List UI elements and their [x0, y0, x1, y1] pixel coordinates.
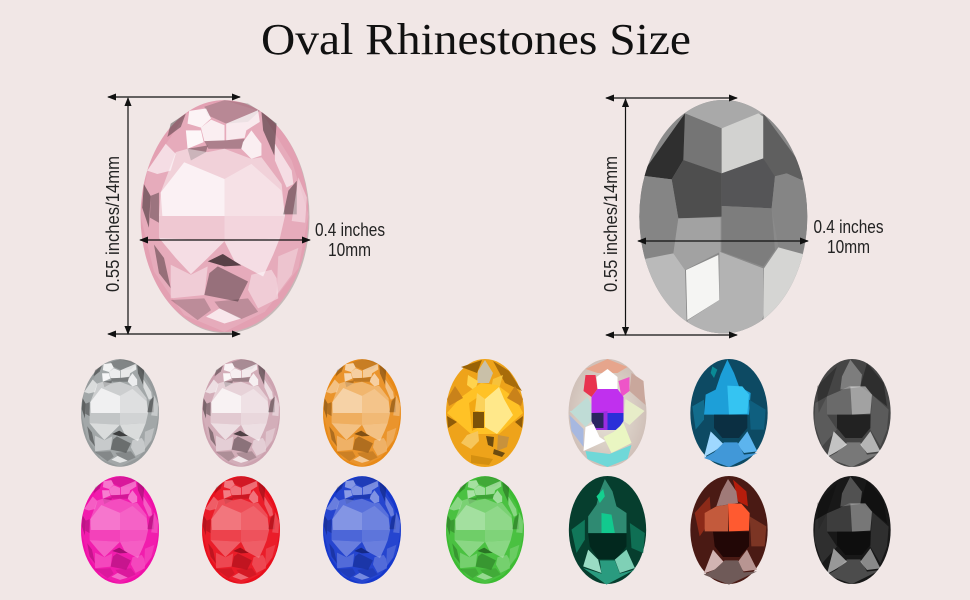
width label	[315, 219, 385, 260]
icon: magenta gem	[81, 476, 159, 584]
icon: emerald gem	[569, 476, 646, 585]
width label: 0.4 inches	[315, 219, 385, 240]
height label: 0.55 inches/14mm	[102, 156, 123, 292]
title: Oval Rhinestones Size	[261, 15, 691, 64]
arrow: width	[638, 240, 808, 242]
icon: orange gem	[323, 359, 401, 467]
arrow: height	[127, 98, 129, 334]
icon: clear gem	[81, 359, 159, 467]
width label: 0.4 inches	[814, 216, 884, 237]
large back-side gem with dimensions	[600, 93, 884, 340]
width label	[814, 216, 884, 257]
icon: large pink oval rhinestone	[140, 100, 310, 333]
arrow: width	[140, 239, 310, 241]
icon: light green gem	[446, 476, 524, 584]
width label: 10mm	[827, 236, 870, 257]
icon: black gem	[813, 476, 891, 584]
icon: light pink gem	[202, 359, 280, 467]
large pink gem with dimensions	[102, 97, 385, 334]
arrow: top width guide	[108, 96, 240, 98]
height label: 0.55 inches/14mm	[600, 156, 621, 292]
arrow: bottom width guide	[606, 334, 737, 336]
icon: red gem	[202, 476, 280, 584]
colour swatches grid	[81, 359, 891, 585]
icon: teal blue gem	[690, 359, 768, 467]
icon: blue gem	[323, 476, 401, 584]
arrow: top width guide	[606, 97, 737, 99]
icon: aurora borealis gem	[568, 359, 646, 467]
arrow: bottom width guide	[108, 333, 240, 335]
width label: 10mm	[328, 239, 371, 260]
icon: grey gem	[813, 359, 891, 467]
icon: amber yellow gem	[446, 359, 524, 467]
icon: dark red gem	[690, 476, 768, 585]
icon: foil back of rhinestone	[639, 100, 808, 334]
arrow: height	[624, 99, 626, 335]
